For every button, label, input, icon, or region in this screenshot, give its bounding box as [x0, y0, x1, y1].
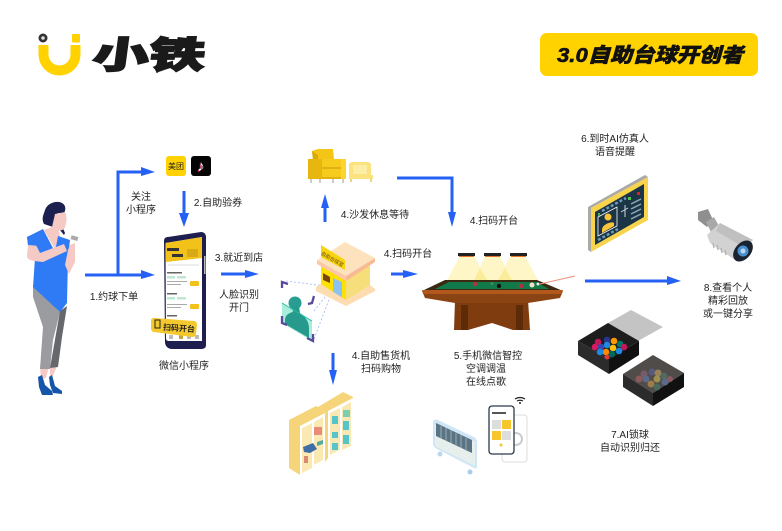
label: scan open table top: 4.扫码开台: [470, 214, 518, 227]
table legs: [454, 300, 530, 330]
arrow: down to vending: [329, 353, 337, 385]
store base: [316, 284, 375, 306]
arrow: table to camera: [585, 276, 681, 285]
illustration: security camera: [698, 209, 757, 265]
illustration: open ball box: [578, 310, 663, 374]
hair: [43, 202, 65, 235]
cue: [540, 276, 575, 284]
label: 2: 2.自助验券: [194, 196, 242, 209]
arrow: store to table: [391, 270, 418, 278]
label: replay: 精彩回放: [708, 294, 748, 307]
right arm: [65, 243, 75, 274]
scan button: 扫码开台: [163, 322, 195, 334]
scan lines: [286, 281, 333, 339]
label: smart control: 5.手机微信智控: [454, 351, 522, 362]
label: AI voice reminder: 6.到时AI仿真人: [581, 134, 649, 145]
label: follow mini program: 关注: [131, 192, 151, 203]
illustration: armchairs: [308, 149, 373, 183]
arrow: order to mini program: [85, 167, 155, 279]
illustration: phone control: [489, 398, 527, 462]
label: face unlock: 人脸识别: [219, 290, 259, 301]
label: vending: 扫码购物: [361, 362, 401, 375]
label: sofa: 4.沙发休息等待: [341, 208, 409, 221]
illustration: store with face recognition: [282, 242, 375, 341]
main armchair: [308, 149, 346, 183]
label: 1: 1.约球下单: [90, 290, 138, 303]
title badge: [540, 33, 758, 76]
label: face unlock: 开门: [229, 301, 249, 314]
label: 3: 3.就近到店: [215, 251, 263, 264]
label: AI voice reminder: 语音提醒: [595, 145, 635, 158]
illustration: air conditioner heater: [433, 420, 477, 474]
illustration: billiard table: [422, 253, 575, 330]
illustration: woman with phone: [27, 202, 78, 395]
small armchair: [349, 162, 373, 182]
label: wechat mini program: 微信小程序: [159, 359, 209, 372]
store body: [321, 265, 346, 302]
legs: [33, 285, 60, 369]
sign: [321, 245, 345, 270]
icon: meituan: 美团: [168, 161, 184, 171]
left arm: [27, 243, 67, 262]
face scanner: [282, 282, 314, 341]
title badge: 3.0自助台球开创者: [557, 44, 746, 67]
illustration: store with face recognition: 自助台球室: [320, 250, 345, 269]
illustration: control panel tablet: [588, 175, 648, 252]
label: replay: 8.查看个人: [704, 283, 752, 294]
balls: [473, 282, 477, 286]
logo icon: U with ball: [38, 34, 80, 70]
logo: [38, 34, 208, 77]
logo wordmark: 小铁: [90, 35, 208, 77]
label: vending: 4.自助售货机: [352, 351, 410, 362]
shoes: [38, 375, 53, 395]
arrow: go to store: [221, 270, 259, 278]
calves: [40, 366, 57, 379]
blue top: [27, 229, 70, 312]
store roof: [317, 242, 375, 276]
table top: [422, 280, 563, 291]
phone in hand: [71, 235, 78, 241]
illustration: mini program phone: [151, 232, 206, 349]
label: replay: 或一键分享: [703, 307, 753, 320]
label: AI ball lock: 7.AI锁球: [611, 430, 649, 441]
illustration: closed ball box: [623, 355, 684, 406]
lamps: [447, 256, 538, 280]
illustration: vending machines: [289, 392, 353, 475]
wifi icon: [515, 398, 525, 401]
sleeve: [27, 233, 40, 246]
label: smart control: 空调调温: [466, 362, 506, 375]
label: AI ball lock: 自动识别归还: [600, 441, 660, 454]
face and neck: [44, 212, 66, 251]
arrow: up to sofa: [321, 194, 329, 222]
label: follow mini program: 小程序: [126, 203, 156, 216]
icon: tiktok: ♪: [196, 159, 204, 176]
arrow: sofa to table: [397, 178, 456, 227]
arrow: verify: [179, 191, 189, 227]
label: smart control: 在线点歌: [466, 375, 506, 388]
label: scan open table: 4.扫码开台: [384, 247, 432, 260]
icon: tiktok: [191, 156, 211, 176]
icon: tiktok: ♪: [197, 158, 205, 175]
icon: meituan: [166, 156, 186, 176]
